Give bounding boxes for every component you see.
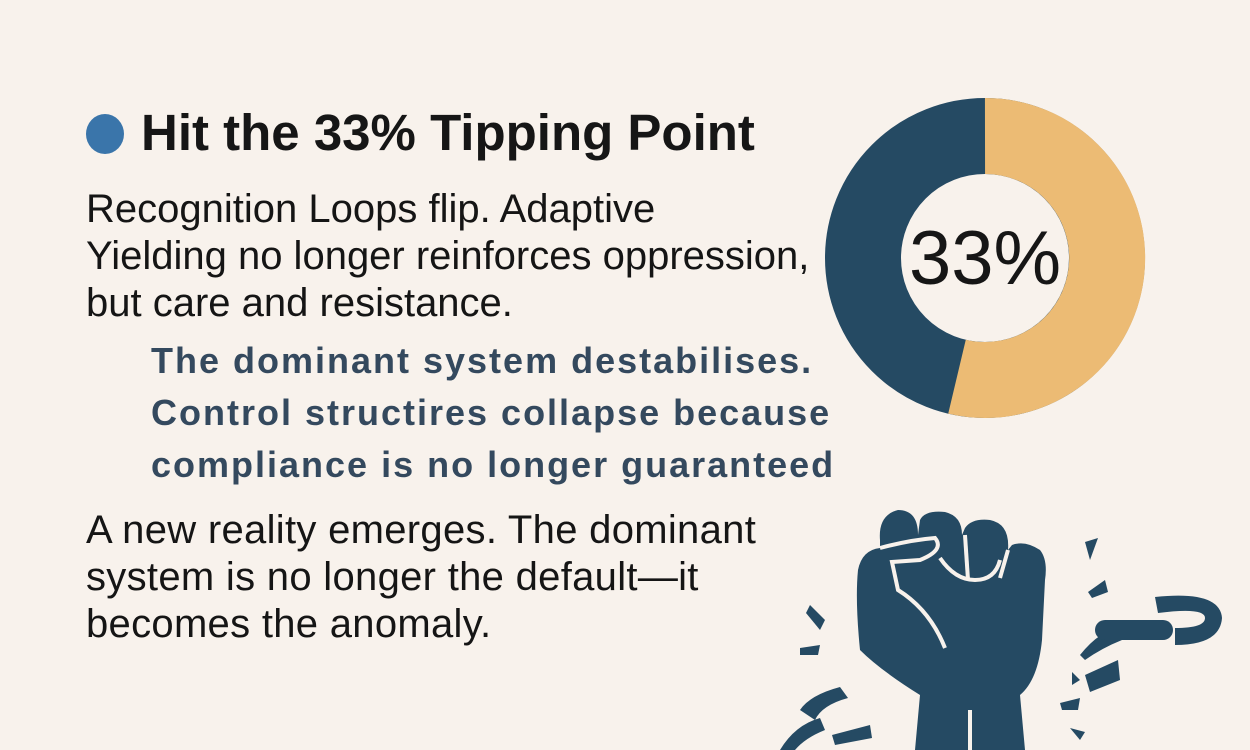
text block: intro: Yielding no longer reinforces oppression, [86,234,809,278]
text block: intro: but care and resistance. [86,281,513,325]
chart: donut 33% [825,98,1146,418]
text block: highlighted bold: compliance is no longer guaranteed [151,444,835,485]
label: 33%: 33% [909,216,1061,301]
text block: highlighted bold [151,340,835,485]
text block: conclusion: system is no longer the default—it [86,555,699,599]
text block: intro [86,187,809,325]
icon: blue bullet [86,114,124,154]
text block: intro: Recognition Loops flip. Adaptive [86,187,655,231]
text block: conclusion: A new reality emerges. The dominant [86,508,756,552]
title: Hit the 33% Tipping Point [141,104,755,161]
text block: conclusion: becomes the anomaly. [86,602,491,646]
icon: raised fist breaking chains [780,510,1222,750]
text block: highlighted bold: The dominant system destabilises. [151,340,813,381]
text block: conclusion [86,508,756,646]
text block: highlighted bold: Control structires collapse because [151,392,831,433]
